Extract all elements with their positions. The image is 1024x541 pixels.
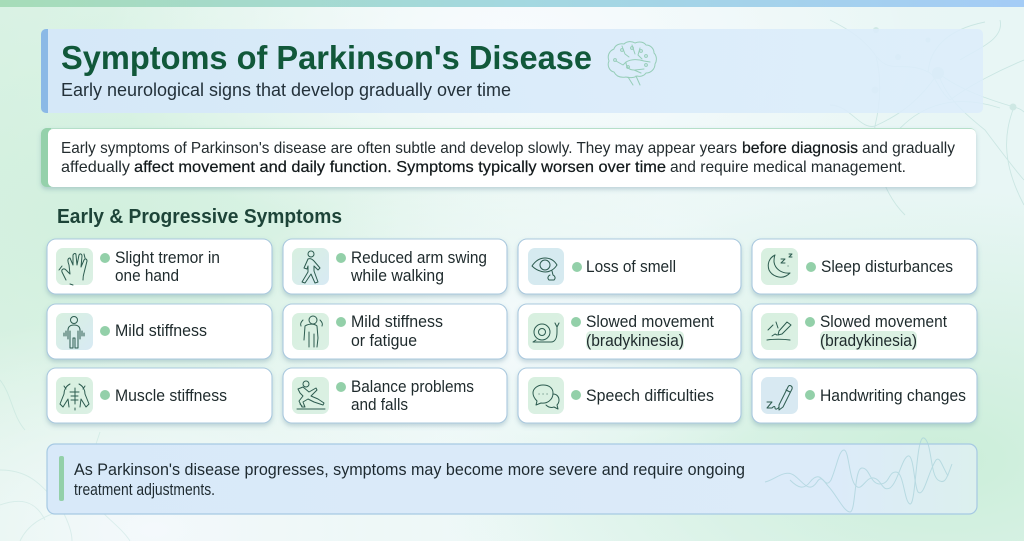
intro text line one: Early symptoms of Parkinson's disease are often subtle and develop slowly. They may appear years [61,140,737,157]
intro text line one: and gradually [862,140,955,157]
intro panel [41,128,976,187]
callout text: As Parkinson's disease progresses, symptoms may become more severe and require ongoing [74,461,745,479]
symptom card: handwriting changes: Handwriting changes [820,387,966,405]
symptom card: slight tremor: one hand [115,267,179,285]
icon: speech bubbles [533,385,559,409]
symptom card: slight tremor: Slight tremor in [115,249,220,267]
symptom card: slowed movement (snail) [518,304,741,359]
callout text [74,461,745,499]
icon: moon and stars [768,254,792,277]
waveform decoration [765,438,952,512]
symptom card: speech difficulties: Speech difficulties [586,387,714,405]
symptom card: mild stiffness [47,304,272,359]
symptom card: balance problems: and falls [351,396,408,414]
symptom card: loss of smell [518,239,741,294]
intro text line two: and require medical management. [670,159,906,176]
section heading: Early & Progressive Symptoms [57,206,342,228]
symptom card: balance problems: Balance problems [351,378,474,396]
intro text line two [61,159,906,176]
top accent bar [0,0,1024,7]
symptom card: muscle stiffness: Muscle stiffness [115,387,227,405]
symptom card: mild stiffness or fatigue: Mild stiffness [351,313,443,331]
symptom card: mild stiffness: Mild stiffness [115,322,207,340]
symptom card: reduced arm swing: while walking [350,267,444,285]
icon: walking person [302,259,320,283]
icon: standing person [64,325,84,348]
symptom card: loss of smell: Loss of smell [586,258,676,276]
highlight: bradykinesia [586,331,684,350]
intro text line one: before diagnosis [742,140,858,157]
title: Symptoms of Parkinson's Disease [61,40,592,77]
icon: torso muscles [60,384,89,410]
subtitle: Early neurological signs that develop gradually over time [61,79,511,100]
icon: falling person [297,387,325,409]
symptom card: balance problems [283,368,507,423]
symptom card: muscle stiffness [47,368,272,423]
symptom card: slight tremor [47,239,272,294]
symptom card: slowed movement (hand): (bradykinesia) [820,332,917,350]
symptom card: mild stiffness or fatigue: or fatigue [351,332,417,350]
symptom card: slowed movement (hand) [752,304,977,359]
symptom card: reduced arm swing: Reduced arm swing [351,249,487,267]
icon: snail [533,323,559,342]
symptom card: mild stiffness or fatigue [283,304,507,359]
icon: brain [608,42,656,85]
intro text line two: affect movement and daily function. Symptoms typically worsen over time [134,159,666,176]
symptom card: slowed movement (snail): (bradykinesia) [586,332,684,350]
accent bar [59,456,64,501]
highlight: bradykinesia [820,331,917,350]
icon: eye and nose [532,258,557,280]
symptom card: reduced arm swing [283,239,507,294]
callout text: treatment adjustments. [74,481,215,499]
symptom card: speech difficulties [518,368,741,423]
symptom card: slowed movement (hand): Slowed movement [820,313,947,331]
icon: writing stroke [767,322,791,340]
background neuron network, top right [830,20,1024,215]
symptom card: handwriting changes [752,368,977,423]
footer callout [47,438,977,514]
symptom card: sleep disturbances: Sleep disturbances [821,258,953,276]
background neuron network, bottom left [0,380,130,541]
symptom card: sleep disturbances [752,239,977,294]
icon: pen and signature [767,386,792,410]
symptom card: slowed movement (snail): Slowed movement [586,313,714,331]
intro text line two: affedually [61,159,130,176]
icon: stooped person [301,320,322,347]
header panel [41,29,983,113]
icon: hand [59,254,87,285]
